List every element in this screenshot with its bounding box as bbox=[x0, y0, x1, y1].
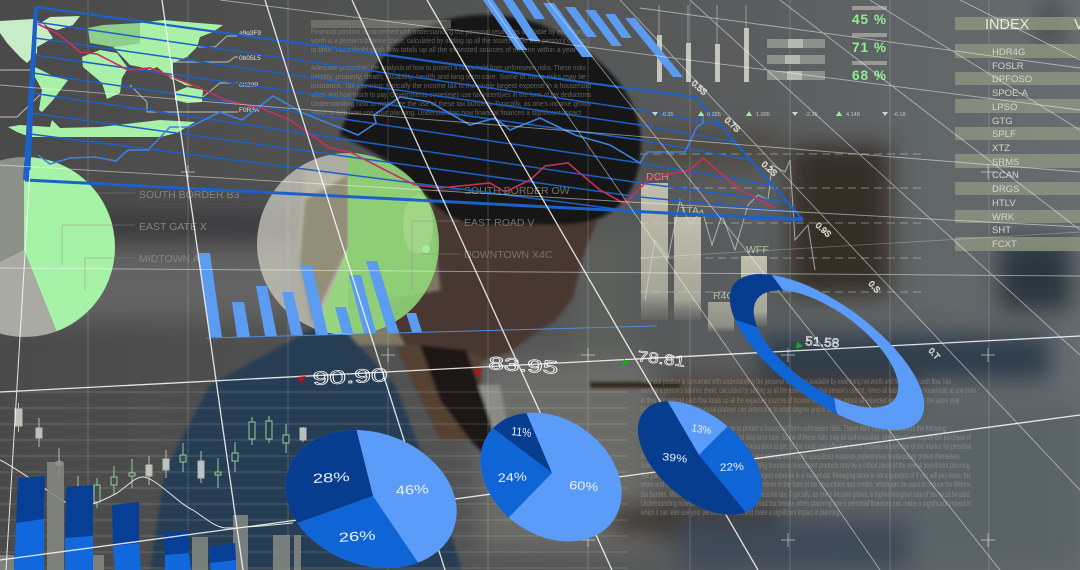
map callout leader lines and codes bbox=[0, 30, 261, 117]
chart: blue spike bars bbox=[198, 253, 657, 338]
map callout leader lines and codes: F0R3A bbox=[239, 107, 260, 114]
index table: SPOE-A bbox=[992, 88, 1029, 99]
map callout leader lines and codes: 0b05L5 bbox=[239, 55, 261, 62]
pie chart 1: 46% bbox=[395, 481, 430, 498]
index table: WRK bbox=[992, 212, 1015, 223]
pie chart 2: 60% bbox=[569, 478, 599, 494]
region labels with leader lines: SOUTH BORDER B3 bbox=[139, 189, 240, 201]
value label 78.81: 78.81 bbox=[637, 348, 686, 371]
slanted tick labels: 0.S bbox=[867, 279, 883, 295]
chart: gray background columns bbox=[0, 462, 301, 570]
index table: GTG bbox=[992, 116, 1013, 127]
index table: HDR4G bbox=[992, 47, 1025, 58]
text block: faint article, bottom: From this analysis, the financial planner can determine to what degree and in what time the personal goals bbox=[641, 405, 896, 414]
pie chart 2: 11% bbox=[511, 424, 532, 440]
row of small change markers: 4.148 bbox=[846, 112, 860, 118]
text block: faint article, top: when and how much to pay. Governments sometimes use tax incentives in the form of tax deductions bbox=[310, 90, 591, 99]
gray stacked mini bars bbox=[767, 39, 825, 80]
text block: faint article, top: liability, property, death, disability, health and long term care. Some of these risks may be bbox=[311, 72, 586, 81]
slanted tick labels: 0.5S bbox=[690, 78, 710, 97]
region labels with leader lines: MIDTOWN A46 bbox=[139, 253, 211, 265]
index table: INDEX bbox=[985, 17, 1030, 33]
text block: faint article, top: which in turn later use your planning. Understanding how financial finances a significant impact bbox=[310, 108, 581, 117]
text block: faint article, top: worth is a person's balance sheet, calculated by adding up all the assets under that person's control bbox=[310, 36, 586, 45]
slanted tick labels: 0.9S bbox=[814, 220, 834, 239]
percentage readouts: 71 % bbox=[852, 39, 887, 55]
donut chart bbox=[730, 274, 924, 430]
chart: pale column bars with labels: TTA bbox=[680, 205, 699, 217]
pie chart 2 bbox=[480, 412, 622, 542]
index table: HTLV bbox=[992, 198, 1016, 209]
chart: top candlestick bars bbox=[657, 5, 749, 82]
row of small change markers bbox=[652, 111, 906, 118]
center pie chart bbox=[257, 153, 439, 335]
row of small change markers: 0.285 bbox=[707, 112, 721, 118]
index table: SHT bbox=[992, 225, 1011, 236]
text block: faint article, top: in time. Household cash flow totals up all the expected sources of income within a year bbox=[311, 45, 577, 54]
pie chart 3: 22% bbox=[720, 461, 744, 474]
plus-shaped crosshair marks bbox=[181, 165, 995, 547]
region labels with leader lines: SOUTH BORDER OW bbox=[464, 185, 570, 197]
index table: FCXT bbox=[992, 239, 1017, 250]
map callout leader lines and codes: 0K30P bbox=[239, 82, 259, 89]
text block: faint article, top bbox=[310, 20, 591, 117]
slanted tick labels: 0.T bbox=[927, 346, 942, 361]
chart: blue stacked bars bbox=[14, 476, 236, 570]
chart: pale column bars with labels bbox=[640, 154, 925, 332]
index table: DPFOSO bbox=[992, 74, 1032, 85]
index table bbox=[955, 17, 1080, 251]
index table: SRMS bbox=[992, 157, 1019, 168]
percentage readouts: 45 % bbox=[852, 11, 887, 27]
chart: pale column bars with labels: WFF bbox=[746, 244, 769, 256]
region labels with leader lines: EAST GATE X bbox=[139, 221, 207, 233]
chart: pale column bars with labels: DCH bbox=[646, 171, 669, 183]
world map bbox=[0, 16, 223, 137]
pie chart 3 bbox=[638, 401, 762, 515]
text block: faint article, top: Understanding how to maximize the use of these tax burdens. Typically, as one's income grows bbox=[311, 99, 591, 108]
chart: candlesticks lower left bbox=[15, 403, 306, 508]
value label 90.90: 90.90 bbox=[312, 365, 388, 390]
percentage readouts: 68 % bbox=[852, 67, 887, 83]
pie chart 3: 39% bbox=[662, 451, 688, 466]
value label 51.58: 51.58 bbox=[805, 334, 840, 350]
row of small change markers: -6.18 bbox=[893, 112, 906, 118]
ear marker bbox=[422, 245, 430, 253]
pie chart 1: 26% bbox=[338, 527, 377, 545]
region labels with leader lines bbox=[62, 185, 570, 290]
index table: XTZ bbox=[992, 143, 1010, 154]
chart: blue market line bbox=[38, 96, 703, 164]
region labels with leader lines: DOWNTOWN X4C bbox=[464, 249, 553, 261]
row of small change markers: -0.35 bbox=[661, 112, 674, 118]
pie chart 1: 28% bbox=[312, 469, 351, 486]
text block: faint article, top: Adequate protection: the analysis of how to protect a household from unforeseen risks. These risks bbox=[311, 63, 586, 72]
index table: LPSO bbox=[992, 102, 1017, 113]
chart: top blue perspective bars bbox=[483, 0, 683, 77]
pie chart 1 bbox=[285, 430, 457, 568]
chart: white smooth curve bbox=[0, 460, 293, 528]
value label 83.95: 83.95 bbox=[488, 353, 559, 378]
chart: blue perspective frame bbox=[23, 7, 803, 220]
region labels with leader lines: EAST ROAD V bbox=[464, 217, 534, 229]
value label 83.95 bbox=[474, 353, 559, 378]
index table: FOSLR bbox=[992, 61, 1024, 72]
index table: CCAN bbox=[992, 170, 1019, 181]
text block: faint article, bottom bbox=[640, 377, 976, 517]
slanted tick labels bbox=[690, 78, 942, 361]
row of small change markers: -2.35 bbox=[805, 112, 818, 118]
chart: pale column bars with labels: R4G bbox=[713, 290, 735, 302]
percentage readouts bbox=[852, 6, 887, 83]
slanted tick labels: 0.2S bbox=[760, 159, 780, 178]
left pie chart bbox=[0, 157, 115, 337]
row of small change markers: 1.005 bbox=[756, 112, 770, 118]
chart: red market line bbox=[38, 24, 775, 208]
pie chart 2: 24% bbox=[497, 469, 527, 485]
index table: DRGS bbox=[992, 184, 1019, 195]
map callout leader lines and codes: a9g3F9 bbox=[239, 30, 261, 37]
text block: faint article, top: insurance. Tax planning: typically the income tax is the single largest expense in a household bbox=[311, 81, 591, 90]
pie chart 3: 13% bbox=[690, 422, 712, 437]
value label 90.90 bbox=[297, 365, 388, 390]
slanted tick labels: 0.7S bbox=[723, 115, 743, 134]
value label 78.81 bbox=[622, 348, 686, 371]
text block: faint article, bottom: which it can later use your personal finances and make a significant impact in planning. bbox=[640, 508, 841, 517]
text block: faint article, top: Financial position is concerned with understanding the personal resources available by examining bbox=[311, 27, 586, 36]
chart: white volatility line bbox=[645, 160, 815, 300]
index table: SPLF bbox=[992, 129, 1016, 140]
